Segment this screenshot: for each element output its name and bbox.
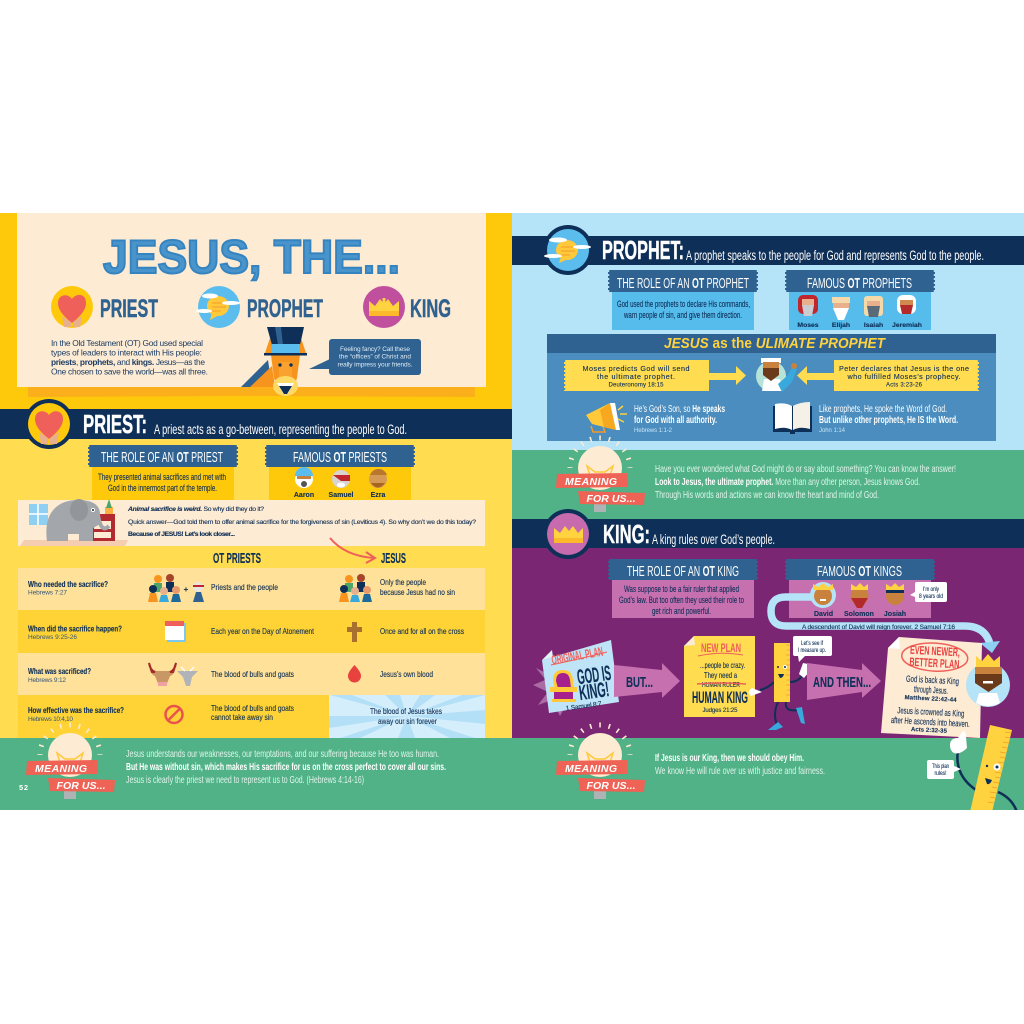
table row: what was sacrificed: Jesus’s own blood — [380, 669, 433, 679]
callout: Josiah speech — [910, 582, 947, 602]
table row: when did the sacrifice happen: Each year on the Day of Atonement — [211, 626, 314, 636]
card: new plan: Judges 21:25 — [702, 708, 738, 714]
card: even newer better plan: EVEN NEWER, — [910, 643, 960, 659]
panel: intro — [17, 213, 486, 397]
heading band: prophet: PROPHET: — [602, 235, 684, 265]
panel: role of OT king: get rich and powerful. — [652, 606, 711, 617]
panel: famous OT prophets — [785, 270, 935, 330]
panel: role of OT priest: THE ROLE OF AN OT PRIEST — [101, 450, 223, 466]
card: even newer better plan: after He ascends into heaven. — [891, 715, 970, 729]
table row: how effective was the sacrifice: Hebrews 10:4,10 — [28, 716, 73, 723]
table row: how effective was the sacrifice: The blood of Jesus takes — [370, 706, 442, 716]
text block: He speaks: for God with all authority. — [634, 415, 717, 426]
text block: intro: types of leaders to interact with His people: — [51, 348, 202, 358]
heading band: priest: A priest acts as a go-between, representing the people to God. — [154, 422, 407, 437]
text block: king meaning: We know He will rule over us with justice and fairness. — [655, 765, 825, 777]
table row: when did the sacrifice happen: Hebrews 9:25-26 — [28, 634, 77, 641]
panel: Jesus as the ultimate prophet — [547, 334, 996, 441]
panel: famous OT priests — [265, 445, 415, 500]
heading band: prophet — [512, 225, 1024, 275]
text block: intro: One chosen to save the world—was all three. — [51, 366, 208, 376]
callout: bulb meaning for us, prophet: MEANING — [565, 476, 617, 488]
icon: priest badge — [24, 399, 74, 449]
icon: Jesus the king — [966, 654, 1010, 707]
panel: famous OT prophets: Moses — [797, 322, 819, 329]
text block: intro: In the Old Testament (OT) God used special — [51, 338, 203, 348]
icon: Ezra — [369, 469, 387, 488]
panel: animal sacrifice note: Because of JESUS! Let’s look closer... — [128, 531, 235, 538]
table row: what was sacrificed — [18, 653, 485, 695]
icon: calendar — [165, 621, 186, 642]
icon: megaphone — [586, 403, 627, 432]
icon: Moses — [798, 295, 818, 316]
icon: Elijah — [832, 297, 850, 320]
arrow: descendant of David — [771, 597, 1000, 653]
character: ruler walking — [749, 643, 809, 730]
arrow: to Jesus column — [330, 538, 375, 563]
panel: role of OT king: God’s law. But too often they used their role to — [619, 595, 744, 606]
panel: famous OT priests: Aaron — [294, 492, 314, 499]
callout: bulb meaning for us, prophet: FOR US... — [586, 493, 636, 505]
icon: Jesus waving — [756, 358, 797, 392]
panel: famous OT prophets: Elijah — [832, 322, 850, 329]
text block: priest meaning: But He was without sin, which makes His sacrifice for us on the cross perfect to cover all our sins. — [126, 761, 446, 773]
text block: He speaks — [634, 404, 725, 434]
arrow: and then — [807, 663, 881, 700]
arrow ribbon: Moses predicts: Moses predicts God will send — [582, 364, 690, 373]
icon: cross — [347, 622, 362, 642]
table row: what was sacrificed: What was sacrificed? — [28, 667, 91, 676]
text block: priest meaning: Jesus understands our weaknesses, our temptations, and our suffering because He too was human. — [126, 748, 439, 760]
icon: prophet speech — [196, 286, 240, 328]
text block: prophet meaning: Look to Jesus, the ultimate prophet. More than any other person, Jesus knows God. — [655, 476, 920, 488]
text block: prophet meaning: Through His words and actions we can know the heart and mind of God. — [655, 489, 879, 501]
panel: famous OT priests: Samuel — [329, 492, 354, 499]
text block: He speaks: He’s God’s Son, so He speaks — [634, 404, 725, 415]
card: even newer better plan: Matthew 22:42-44 — [904, 695, 957, 704]
callout: bulb meaning for us, king: FOR US... — [586, 780, 636, 792]
icon: people — [148, 574, 181, 602]
card: even newer better plan: Acts 2:32-35 — [911, 727, 948, 735]
text block: He is the Word: John 1:14 — [819, 428, 846, 434]
table row: what was sacrificed: The blood of bulls and goats — [211, 669, 294, 679]
card: even newer better plan: God is back as King — [906, 674, 959, 686]
icon: Aaron — [295, 467, 313, 488]
icon: people — [339, 574, 372, 602]
card: original plan: GOD IS — [576, 662, 613, 689]
panel: role of OT prophet: THE ROLE OF AN OT PROPHET — [617, 276, 749, 292]
callout: donkey speech — [309, 339, 421, 375]
arrow ribbon: Peter declares: Peter declares that Jesus is the one — [839, 364, 969, 373]
card: even newer better plan — [881, 637, 982, 738]
callout: bulb meaning for us, priest: FOR US... — [56, 780, 106, 792]
card: new plan: NEW PLAN — [701, 641, 741, 655]
table row: who needed the sacrifice: Who needed the sacrifice? — [28, 580, 108, 589]
heading: priest: PRIEST — [100, 295, 158, 323]
card: even newer better plan: BETTER PLAN — [909, 655, 960, 671]
panel: famous OT kings — [771, 559, 1000, 653]
card: new plan: HUMAN KING — [692, 688, 748, 707]
panel: role of OT king: Was suppose to be a fair ruler that applied — [624, 584, 739, 595]
table row: who needed the sacrifice: because Jesus had no sin — [380, 587, 455, 597]
table row: who needed the sacrifice: Hebrews 7:27 — [28, 590, 67, 596]
panel heading: JESUS as the ULIMATE PROPHET — [664, 335, 887, 352]
panel: animal sacrifice note — [18, 499, 485, 546]
text block: king meaning: If Jesus is our King, then we should obey Him. — [655, 752, 804, 764]
callout: donkey speech: really impress your friends. — [338, 362, 413, 368]
panel: famous OT priests: Ezra — [371, 492, 385, 499]
heading band: king — [512, 509, 1024, 559]
left page background — [0, 213, 512, 738]
arrow ribbon: Peter declares: Acts 3:23-26 — [886, 382, 923, 388]
table row: how effective was the sacrifice: cannot take away sin — [211, 712, 273, 722]
card: even newer better plan: through Jesus. — [914, 684, 948, 696]
callout: ruler this plan rules: This plan — [932, 764, 949, 770]
icon: donkey with top hat — [241, 327, 307, 396]
panel: role of OT prophet — [608, 270, 758, 330]
table row: who needed the sacrifice: + — [184, 585, 189, 594]
text block: king meaning — [655, 752, 825, 777]
arrow ribbon: Moses predicts: Deuteronomy 18:15 — [608, 382, 664, 388]
icon: goat — [177, 667, 198, 686]
arrow: descendant of David: A descendent of David will reign forever. 2 Samuel 7:16 — [802, 624, 955, 631]
panel: role of OT king: THE ROLE OF AN OT KING — [627, 564, 739, 580]
panel: bottom green strip — [0, 738, 1024, 810]
callout: bulb meaning for us, king: MEANING — [565, 763, 617, 775]
arrow: and then: AND THEN... — [813, 674, 871, 691]
panel: animal sacrifice note: Animal sacrifice is weird. So why did they do it? — [127, 506, 264, 513]
icon: king crown — [363, 286, 405, 328]
table row: how effective was the sacrifice — [18, 695, 485, 738]
card: original plan: KING! — [578, 678, 611, 705]
character: ruler thumbs up — [950, 725, 1017, 812]
table row: when did the sacrifice happen: Once and for all on the cross — [380, 626, 464, 636]
text block: He is the Word — [819, 404, 958, 434]
icon: throne — [550, 670, 577, 702]
text block: priest meaning: Jesus is clearly the priest we need to represent us to God. (Hebrews 4:14-16) — [126, 774, 364, 786]
card: new plan — [684, 636, 755, 717]
card: original plan: 1 Samuel 8:7 — [565, 700, 602, 712]
card: new plan: ...people be crazy. — [700, 660, 745, 670]
heading band: priest — [0, 399, 512, 449]
heading band: priest: PRIEST: — [83, 409, 147, 439]
table row: who needed the sacrifice: Priests and the people — [211, 582, 278, 592]
card: new plan: They need a — [704, 670, 737, 680]
panel: role of OT king — [608, 559, 758, 618]
icon: David — [810, 582, 836, 608]
icon: king badge — [543, 509, 593, 559]
table row: when did the sacrifice happen: When did the sacrifice happen? — [28, 624, 122, 634]
table row: how effective was the sacrifice: away our sin forever — [378, 716, 437, 726]
panel: famous OT kings: Josiah — [884, 611, 906, 618]
panel: role of OT priest: They presented animal sacrifices and met with — [98, 472, 226, 483]
callout: bulb meaning for us, king — [556, 725, 645, 799]
table row: what was sacrificed: Hebrews 9:12 — [28, 677, 66, 684]
callout: Josiah speech: 8 years old — [919, 594, 943, 600]
icon: bull — [149, 663, 176, 686]
column heading: Jesus: JESUS — [381, 551, 406, 567]
panel: famous OT kings: FAMOUS OT KINGS — [817, 564, 902, 580]
panel: prophet meaning background — [512, 450, 1024, 519]
panel: famous OT kings: David — [814, 611, 833, 618]
callout: donkey speech: the “offices” of Christ and — [339, 354, 411, 360]
panel: role of OT prophet: warn people of sin, and give them direction. — [623, 310, 742, 321]
icon: open book — [773, 402, 812, 434]
callout: ruler this plan rules — [927, 760, 961, 779]
icon: Samuel — [332, 470, 350, 488]
arrow ribbon: Peter declares — [797, 360, 979, 391]
panel: animal sacrifice note: Quick answer—God told them to offer animal sacrifice for the forgiveness of sin (Leviticus 4). So why don’t we do this today? — [128, 519, 476, 526]
icon: Isaiah — [864, 296, 883, 317]
text block: He is the Word: But unlike other prophets, He IS the Word. — [819, 415, 958, 426]
heading band: king: KING: — [603, 519, 650, 549]
icon: blood drop — [348, 665, 361, 683]
icon: priest heart — [51, 286, 93, 328]
card: original plan — [533, 640, 619, 716]
text block: He is the Word: Like prophets, He spoke the Word of God. — [819, 404, 947, 415]
callout: ruler measure: Let’s see if — [801, 640, 823, 647]
text block: intro — [51, 338, 208, 376]
table row: how effective was the sacrifice: The blood of bulls and goats — [211, 703, 294, 713]
icon: Solomon — [850, 583, 868, 608]
icon: priest — [193, 582, 204, 602]
icon: elephant in room — [20, 499, 128, 546]
table row: who needed the sacrifice: Only the people — [380, 577, 426, 587]
callout: bulb meaning for us, prophet — [556, 438, 645, 512]
arrow ribbon: Moses predicts: the ultimate prophet. — [597, 372, 675, 381]
icon: Jeremiah — [897, 295, 916, 314]
right page background — [512, 213, 1024, 738]
sunburst panel — [329, 695, 485, 738]
panel: famous OT prophets: FAMOUS OT PROPHETS — [807, 276, 912, 292]
card: original plan: ORIGINAL PLAN — [550, 644, 604, 667]
card: new plan: HUMAN RULER — [702, 680, 740, 689]
callout: ruler measure: I measure up. — [798, 647, 826, 654]
icon: prophet badge — [543, 225, 593, 275]
callout: bulb meaning for us, priest — [26, 725, 115, 799]
card: even newer better plan: Jesus is crowned as King — [897, 705, 965, 719]
panel: role of OT prophet: God used the prophets to declare His commands, — [617, 299, 750, 310]
callout: bulb meaning for us, priest: MEANING — [35, 763, 87, 775]
panel: role of OT priest: God in the innermost part of the temple. — [108, 483, 217, 494]
panel: role of OT priest — [88, 445, 238, 500]
text block: priest meaning — [126, 748, 446, 786]
panel: famous OT prophets: Jeremiah — [892, 322, 922, 329]
icon: no sign — [166, 706, 182, 723]
title: JESUS, THE... — [103, 230, 400, 283]
text block: intro: priests, prophets, and kings. Jesus—as the — [51, 357, 205, 367]
panel: famous OT kings: Solomon — [844, 611, 874, 618]
panel: famous OT prophets: Isaiah — [864, 322, 883, 329]
panel: famous OT priests: FAMOUS OT PRIESTS — [293, 450, 387, 466]
text block: He speaks: Hebrews 1:1-2 — [634, 428, 673, 434]
callout: ruler measure — [793, 636, 832, 662]
callout: ruler this plan rules: rules! — [934, 771, 947, 777]
heading: king: KING — [410, 295, 451, 323]
arrow: but — [614, 663, 680, 698]
page number: 52 — [19, 783, 28, 792]
icon: Josiah — [886, 583, 904, 605]
arrow ribbon: Moses predicts — [564, 360, 746, 391]
table row: when did the sacrifice happen — [18, 610, 485, 653]
table row: how effective was the sacrifice: How effective was the sacrifice? — [28, 706, 124, 715]
table row: who needed the sacrifice — [18, 568, 485, 610]
callout: Josiah speech: I’m only — [923, 587, 939, 593]
heading: prophet: PROPHET — [247, 295, 323, 323]
arrow: but: BUT... — [626, 674, 653, 691]
text block: prophet meaning — [655, 463, 956, 501]
heading band: king: A king rules over God’s people. — [652, 532, 775, 547]
callout: donkey speech: Feeling fancy? Call these — [340, 346, 410, 353]
column heading: OT priests: OT PRIESTS — [213, 551, 261, 567]
arrow ribbon: Peter declares: who fulfilled Moses’s prophecy. — [846, 372, 960, 381]
